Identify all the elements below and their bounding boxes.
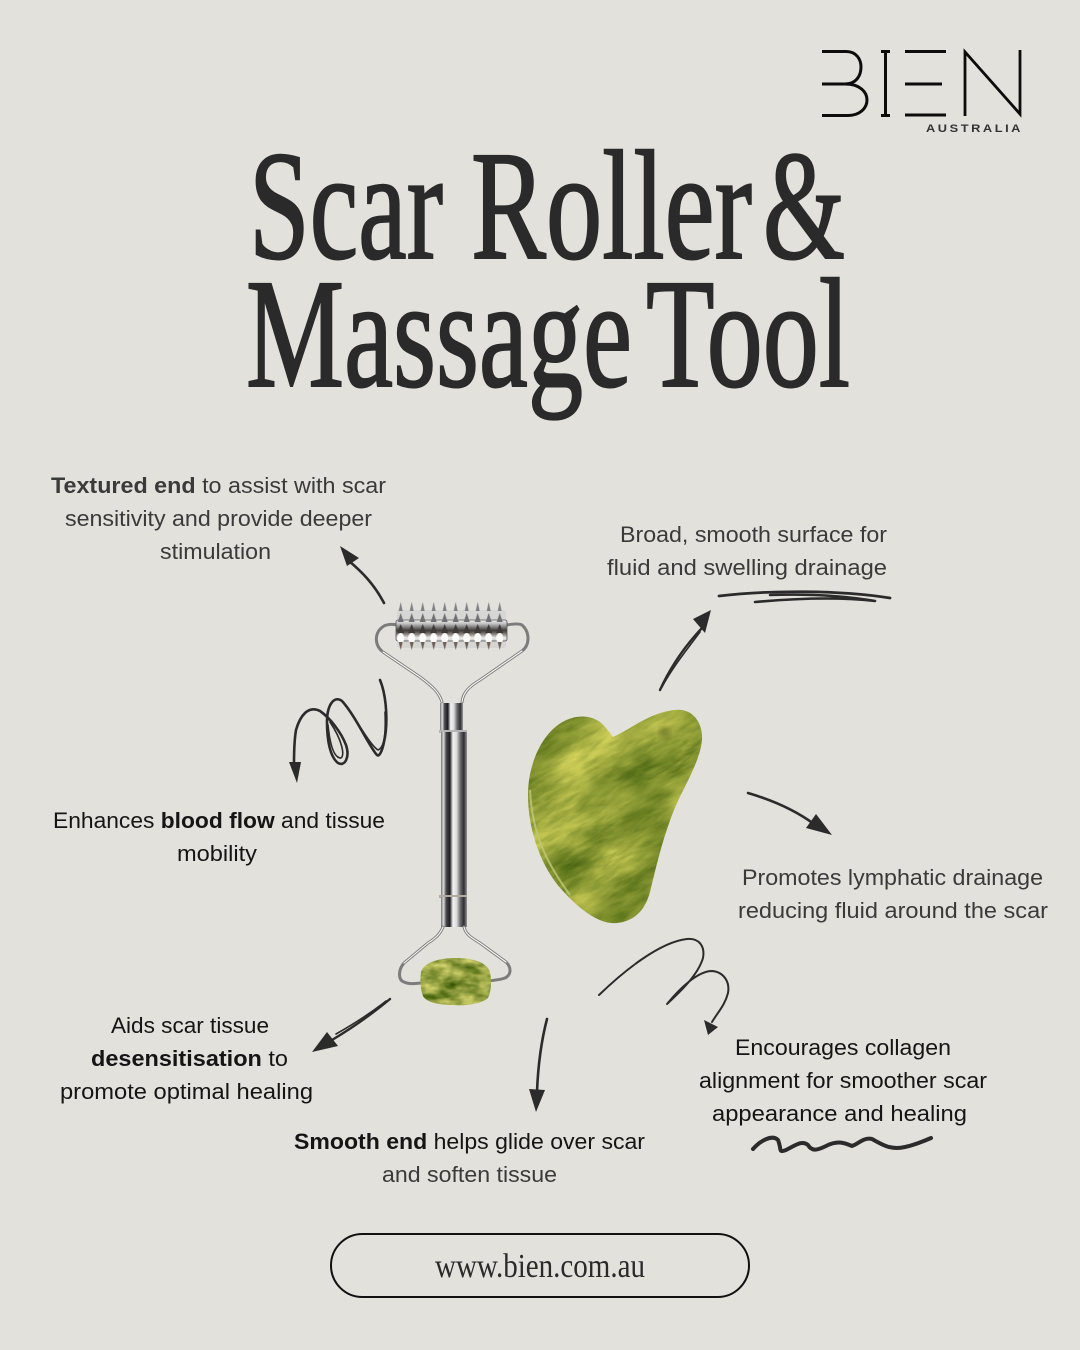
text: collagen: Encourages collagen: [735, 1035, 951, 1060]
text: desensitisation: promote optimal healing: [60, 1079, 313, 1104]
text: broad smooth surface: fluid and swelling drainage: [607, 555, 887, 580]
arrow: to textured end text: [340, 546, 384, 603]
text: blood flow: Enhances blood flow and tissue: [53, 808, 385, 833]
title: &: [763, 119, 845, 292]
text: smooth end: and soften tissue: [382, 1162, 557, 1187]
arrow: to desensitisation text: [312, 999, 390, 1052]
text: smooth end: Smooth end helps glide over scar: [294, 1129, 646, 1154]
title: Scar: [249, 119, 443, 292]
squiggle arrow: blood flow: [289, 680, 386, 783]
roller bottom wire frame: [400, 927, 510, 984]
roller top wire frame: [376, 624, 528, 702]
logo: BIEN Australia: AUSTRALIA: [926, 123, 1023, 135]
icon: jade gua sha: [528, 710, 702, 924]
icon: massage roller: [376, 600, 528, 1012]
title: Roller: [471, 119, 752, 292]
text: collagen: appearance and healing: [712, 1101, 967, 1126]
text: lymphatic drainage: [738, 865, 1049, 923]
text: textured end: Textured end to assist with scar: [51, 473, 387, 498]
text: textured end: [51, 473, 387, 564]
text: lymphatic drainage: reducing fluid around the scar: [738, 898, 1049, 923]
text: smooth end: [294, 1129, 646, 1187]
title: Tool: [646, 247, 850, 420]
arrow: to lymphatic text: [748, 793, 832, 835]
text: desensitisation: desensitisation to: [91, 1046, 288, 1071]
title: [246, 119, 850, 420]
text: broad smooth surface: Broad, smooth surface for: [620, 522, 888, 547]
text: desensitisation: Aids scar tissue: [111, 1013, 269, 1038]
metal handle: [439, 703, 467, 927]
squiggle underline: [753, 1138, 931, 1151]
website pill: www.bien.com.au: [435, 1248, 645, 1285]
text: broad smooth surface: [607, 522, 888, 580]
arrow: to smooth end text: [529, 1019, 547, 1112]
text: blood flow: [53, 808, 385, 866]
text: lymphatic drainage: Promotes lymphatic drainage: [742, 865, 1043, 890]
jade roller stone: [420, 958, 491, 1006]
text: textured end: stimulation: [160, 539, 271, 564]
text: blood flow: mobility: [177, 841, 258, 866]
website pill: [331, 1234, 749, 1297]
scribble underline: [719, 592, 890, 602]
text: textured end: sensitivity and provide deeper: [65, 506, 373, 531]
text: collagen: [699, 1035, 988, 1126]
textured spiked drum: [396, 600, 507, 650]
squiggle arrow: collagen: [599, 939, 728, 1035]
title: Massage: [246, 247, 632, 420]
logo: BIEN Australia: [822, 50, 1023, 135]
text: collagen: alignment for smoother scar: [699, 1068, 988, 1093]
text: desensitisation: [60, 1013, 313, 1104]
arrow: up to broad surface text: [660, 610, 711, 690]
